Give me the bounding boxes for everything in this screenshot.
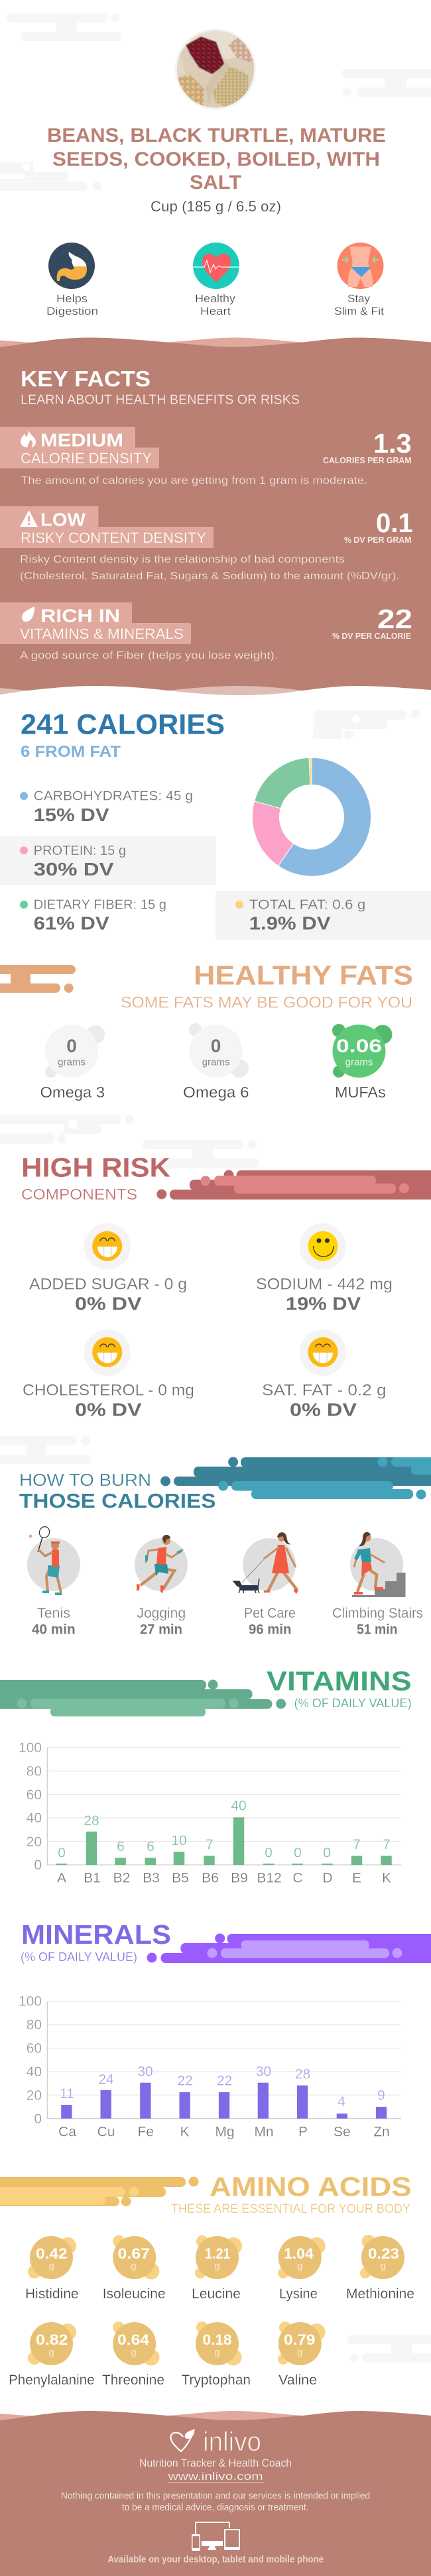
risk item: sodium: [256, 1223, 393, 1314]
macro: protein: 30% DV: [34, 859, 114, 879]
serving size: Cup (185 g / 6.5 oz): [151, 198, 281, 215]
title: SEEDS, COOKED, BOILED, WITH: [52, 148, 380, 170]
macro: dietary fiber: DIETARY FIBER: 15 g: [34, 898, 166, 913]
fat: mufas: 0.06: [336, 1036, 382, 1056]
macro: protein: [0, 836, 216, 885]
fat: omega 3: grams: [58, 1057, 86, 1068]
disclaimer: to be a medical advice, diagnosis or treatment.: [122, 2502, 309, 2513]
fact: low risky content density: [0, 506, 413, 582]
macro: total fat: 1.9% DV: [249, 913, 331, 934]
disclaimer: [61, 2491, 370, 2513]
heading: key facts: LEARN ABOUT HEALTH BENEFITS OR RISKS: [21, 392, 300, 407]
activity: pet care: [233, 1532, 298, 1638]
amino acid: histidine: [25, 2236, 79, 2302]
heading: vitamins: (% OF DAILY VALUE): [294, 1697, 412, 1710]
icon: woman walking dog: [233, 1532, 298, 1594]
heading: healthy fats: SOME FATS MAY BE GOOD FOR YOU: [121, 994, 412, 1012]
fact: medium calorie density: CALORIES PER GRAM: [323, 455, 412, 465]
macro: carbohydrates: CARBOHYDRATES: 45 g: [34, 789, 193, 804]
benefit: stay slim and fit: Stay: [347, 292, 370, 305]
bar chart: vitamins: B12: [257, 1871, 282, 1886]
bar chart: minerals: 11: [60, 2086, 74, 2101]
activity: jogging: [135, 1535, 188, 1638]
amino acid: leucine: [192, 2235, 242, 2302]
amino acid: valine: Valine: [278, 2373, 317, 2388]
amino acid: isoleucine: Isoleucine: [103, 2286, 166, 2302]
amino acid: histidine: 0.42: [36, 2245, 68, 2262]
fact: low risky content density: (Cholesterol, Saturated Fat, Sugars & Sodium) to the amount (%DV/gr).: [20, 571, 399, 582]
bar chart: vitamins: B1: [84, 1871, 101, 1886]
bar chart: vitamins: C: [292, 1871, 303, 1886]
amino acid: threonine: Threonine: [102, 2373, 164, 2388]
bar chart: vitamins: 100: [19, 1740, 42, 1756]
fact: rich in vitamins and minerals: RICH IN: [40, 606, 120, 626]
bar chart: vitamins: 0: [323, 1846, 331, 1861]
risk item: saturated fat: SAT. FAT - 0.2 g: [262, 1382, 386, 1400]
bar chart: minerals: P: [298, 2124, 308, 2139]
title: SALT: [190, 172, 241, 194]
bar chart: minerals: 4: [338, 2094, 345, 2109]
fact: medium calorie density: CALORIE DENSITY: [21, 450, 152, 467]
footer tagline: Nutrition Tracker & Health Coach: [139, 2457, 292, 2469]
heading: calories: [21, 709, 225, 761]
header: food photo: [175, 29, 256, 110]
icon: smiling face: [308, 1231, 338, 1261]
amino acid: tryptophan: [182, 2322, 251, 2388]
amino acid: isoleucine: g: [131, 2261, 137, 2272]
fat: mufas: [332, 1024, 393, 1101]
activity: climbing stairs: Climbing Stairs: [332, 1606, 423, 1621]
icon: grinning face: [92, 1231, 122, 1261]
benefit: stay slim and fit: [334, 243, 384, 317]
amino acid: leucine: Leucine: [192, 2286, 241, 2302]
fat: mufas: grams: [345, 1057, 373, 1068]
heading: how to burn those calories: [19, 1470, 216, 1512]
title: BEANS, BLACK TURTLE, MATURE: [47, 125, 386, 146]
heading: key facts: [21, 366, 300, 407]
risk item: cholesterol: CHOLESTEROL - 0 mg: [23, 1382, 194, 1400]
amino acid: isoleucine: [103, 2235, 166, 2302]
bar chart: vitamins: 10: [171, 1833, 187, 1848]
amino acid: leucine: 1.21: [205, 2245, 230, 2262]
bar chart: vitamins: 20: [27, 1834, 42, 1850]
macro: total fat: TOTAL FAT: 0.6 g: [249, 898, 365, 913]
bar chart: vitamins: 40: [231, 1799, 247, 1814]
activity: climbing stairs: 51 min: [357, 1622, 398, 1638]
fat: omega 6: grams: [202, 1057, 229, 1068]
banner: vitamins graphic: [0, 1679, 286, 1716]
bar chart: vitamins: 60: [27, 1787, 42, 1803]
fat: omega 6: Omega 6: [183, 1084, 249, 1101]
fact: medium calorie density: MEDIUM: [40, 430, 123, 451]
bar chart: vitamins: K: [382, 1871, 391, 1886]
bar chart: vitamins: 0: [34, 1858, 42, 1873]
fact: medium calorie density: [0, 427, 412, 486]
icon: warning triangle: [20, 510, 38, 527]
fact: low risky content density: RISKY CONTENT DENSITY: [21, 530, 206, 546]
amino acid: tryptophan: g: [214, 2347, 220, 2358]
logo: inlivo: inlivo: [203, 2426, 261, 2457]
title: [47, 125, 386, 194]
heading: how to burn those calories: HOW TO BURN: [19, 1470, 151, 1490]
footer link: www.inlivo.com: [167, 2470, 263, 2483]
bar chart: minerals: 0: [34, 2111, 42, 2127]
heading: amino acids: THESE ARE ESSENTIAL FOR YOUR BODY: [171, 2202, 410, 2216]
amino acid: phenylalanine: [9, 2322, 95, 2388]
fat: mufas: MUFAs: [335, 1084, 386, 1101]
fact: low risky content density: Risky Content density is the relationship of bad components: [20, 554, 345, 565]
fat: omega 3: Omega 3: [40, 1084, 105, 1101]
benefit: stay slim and fit: Slim & Fit: [334, 305, 384, 317]
benefit: helps digestion: [46, 243, 98, 317]
bar chart: minerals: Se: [334, 2124, 351, 2139]
availability note: Available on your desktop, tablet and mobile phone: [107, 2555, 324, 2565]
bar chart: vitamins: 28: [84, 1813, 99, 1828]
banner: healthy fats graphic: [0, 965, 76, 993]
heading: healthy fats: HEALTHY FATS: [194, 960, 413, 991]
icon: desktop, tablet and phone: [192, 2522, 240, 2551]
amino acid: threonine: 0.64: [117, 2331, 150, 2348]
heading: vitamins: VITAMINS: [267, 1666, 412, 1697]
bar chart: minerals: K: [180, 2124, 190, 2139]
activity: climbing stairs: [332, 1532, 423, 1638]
macro: protein: PROTEIN: 15 g: [34, 844, 126, 858]
fact: rich in vitamins and minerals: 22: [377, 604, 412, 634]
risk item: cholesterol: [23, 1329, 194, 1420]
banner: high risk graphic: [156, 1170, 431, 1200]
bar chart: minerals: 24: [98, 2072, 114, 2087]
heading: how to burn those calories: THOSE CALORIES: [19, 1489, 216, 1512]
panel: calories: [0, 709, 431, 940]
icon: tennis player: [38, 1525, 62, 1595]
bar chart: vitamins: E: [352, 1871, 361, 1886]
amino acid: methionine: g: [380, 2261, 386, 2272]
fact: low risky content density: % DV PER GRAM: [344, 535, 412, 545]
fat: omega 6: [183, 1023, 249, 1101]
bar chart: vitamins: B9: [231, 1871, 248, 1886]
macro: carbohydrates: [20, 789, 193, 825]
heading: minerals: [21, 1919, 171, 1964]
amino acid: lysine: 1.04: [284, 2245, 314, 2262]
amino acid: threonine: [102, 2322, 164, 2388]
risk item: sodium: 19% DV: [286, 1294, 361, 1314]
bar chart: vitamins: A: [57, 1871, 66, 1886]
bar chart: minerals: Zn: [373, 2124, 390, 2139]
macro: dietary fiber: 61% DV: [34, 913, 109, 934]
fact: rich in vitamins and minerals: % DV PER CALORIE: [332, 631, 411, 641]
banner: amino acids graphic: [0, 2176, 199, 2206]
fat: omega 3: 0: [66, 1036, 77, 1056]
activity: tennis: Tenis: [37, 1606, 70, 1621]
bar chart: vitamins: 7: [206, 1837, 214, 1852]
macro: dietary fiber: [20, 898, 166, 934]
bar chart: minerals: 9: [377, 2088, 385, 2103]
heading: calories: 241 CALORIES: [21, 709, 225, 741]
panel: key facts: [0, 338, 431, 695]
amino acid: leucine: g: [214, 2261, 220, 2272]
risk item: added sugar: ADDED SUGAR - 0 g: [29, 1276, 187, 1294]
fat: omega 3: [40, 1025, 105, 1101]
amino acid: lysine: [278, 2236, 326, 2302]
risk item: sodium: SODIUM - 442 mg: [256, 1276, 393, 1294]
bar chart: minerals: Fe: [137, 2124, 154, 2139]
benefit: healthy heart: [193, 243, 239, 317]
heading: healthy fats: [121, 960, 413, 1012]
bar chart: vitamins: 7: [383, 1837, 391, 1852]
activity: pet care: 96 min: [249, 1622, 292, 1638]
heading: key facts: KEY FACTS: [21, 366, 151, 391]
bar chart: minerals: 22: [177, 2074, 193, 2089]
heading: amino acids: [171, 2171, 412, 2216]
bar chart: vitamins: 0: [265, 1846, 273, 1861]
disclaimer: Nothing contained in this presentation and our services is intended or implied: [61, 2491, 370, 2502]
bar chart: vitamins: 80: [27, 1764, 42, 1779]
activity: pet care: Pet Care: [244, 1606, 296, 1621]
icon: grinning face: [92, 1337, 122, 1367]
bar chart: vitamins: B5: [172, 1871, 189, 1886]
fact: medium calorie density: 1.3: [373, 428, 412, 459]
icon: runner: [137, 1535, 183, 1593]
amino acid: lysine: g: [297, 2261, 302, 2272]
fact: rich in vitamins and minerals: A good source of Fiber (helps you lose weight).: [20, 650, 278, 661]
amino acid: methionine: 0.23: [368, 2245, 399, 2262]
bar chart: vitamins: [19, 1740, 401, 1886]
activity: tennis: [27, 1525, 80, 1638]
activity: jogging: Jogging: [137, 1606, 186, 1621]
bar chart: minerals: [19, 1994, 401, 2139]
heading: high risk components: [21, 1152, 170, 1203]
benefit: healthy heart: Healthy: [195, 292, 236, 305]
icon: leaf: [22, 606, 34, 622]
bar chart: minerals: 22: [217, 2074, 232, 2089]
bar chart: vitamins: B2: [113, 1871, 130, 1886]
fact: rich in vitamins and minerals: [0, 602, 412, 661]
benefit: helps digestion: Helps: [56, 292, 88, 305]
heading: high risk components: COMPONENTS: [21, 1186, 137, 1203]
bar chart: minerals: 28: [295, 2067, 310, 2082]
risk item: cholesterol: 0% DV: [75, 1400, 142, 1420]
benefit: healthy heart: Heart: [200, 305, 231, 317]
macro: carbohydrates: 15% DV: [34, 805, 109, 825]
banner: minerals graphic: [147, 1934, 431, 1963]
amino acid: methionine: Methionine: [346, 2286, 414, 2302]
fact: medium calorie density: The amount of calories you are getting from 1 gram is moderate.: [21, 475, 367, 486]
heading: vitamins: [267, 1666, 412, 1710]
risk item: saturated fat: [262, 1329, 386, 1420]
heading: high risk components: HIGH RISK: [21, 1152, 170, 1183]
bar chart: minerals: Ca: [58, 2124, 76, 2139]
bar chart: vitamins: 7: [353, 1837, 361, 1852]
amino acid: valine: 0.79: [284, 2331, 316, 2348]
heading: minerals: MINERALS: [21, 1919, 171, 1950]
bar chart: minerals: 100: [19, 1994, 42, 2009]
risk item: added sugar: 0% DV: [75, 1294, 142, 1314]
amino acid: methionine: [346, 2235, 414, 2302]
bar chart: vitamins: B3: [143, 1871, 160, 1886]
amino acid: valine: [278, 2322, 326, 2388]
heading: calories: 6 FROM FAT: [21, 743, 121, 761]
bar chart: vitamins: 40: [27, 1811, 42, 1826]
amino acid: phenylalanine: g: [48, 2347, 54, 2358]
bar chart: minerals: Mn: [254, 2124, 274, 2139]
benefit: helps digestion: Digestion: [46, 305, 98, 317]
amino acid: tryptophan: Tryptophan: [182, 2373, 251, 2388]
activity: jogging: 27 min: [140, 1622, 182, 1638]
bar chart: minerals: Cu: [97, 2124, 115, 2139]
bar chart: vitamins: D: [322, 1871, 333, 1886]
bar chart: minerals: Mg: [215, 2124, 235, 2139]
bar chart: minerals: 30: [137, 2064, 153, 2080]
amino acid: phenylalanine: Phenylalanine: [9, 2373, 95, 2388]
amino acid: valine: g: [297, 2347, 302, 2358]
bar chart: minerals: 30: [256, 2064, 271, 2080]
bar chart: vitamins: 0: [294, 1846, 302, 1861]
bar chart: vitamins: 6: [117, 1839, 125, 1854]
risk item: added sugar: [29, 1223, 187, 1314]
bar chart: minerals: 80: [27, 2017, 42, 2033]
bar chart: vitamins: B6: [202, 1871, 219, 1886]
amino acid: tryptophan: 0.18: [203, 2331, 232, 2348]
icon: flame: [21, 430, 36, 447]
risk item: saturated fat: 0% DV: [290, 1400, 357, 1420]
heading: minerals: (% OF DAILY VALUE): [21, 1950, 137, 1964]
logo: inlivo: [170, 2426, 261, 2457]
amino acid: histidine: g: [48, 2261, 54, 2272]
fact: low risky content density: LOW: [40, 510, 86, 530]
macro: total fat: [216, 891, 431, 940]
amino acid: phenylalanine: 0.82: [36, 2331, 68, 2348]
fact: low risky content density: 0.1: [376, 508, 413, 538]
bar chart: vitamins: 6: [147, 1839, 154, 1854]
activity: tennis: 40 min: [32, 1622, 76, 1638]
heading: amino acids: AMINO ACIDS: [210, 2171, 412, 2202]
banner: burn calories graphic: [160, 1457, 431, 1499]
donut chart: calorie sources: [252, 757, 371, 876]
fact: rich in vitamins and minerals: VITAMINS & MINERALS: [20, 626, 184, 642]
amino acid: isoleucine: 0.67: [118, 2245, 150, 2262]
amino acid: histidine: Histidine: [25, 2286, 79, 2302]
amino acid: threonine: g: [131, 2347, 137, 2358]
panel: footer: [0, 2411, 431, 2576]
bar chart: minerals: 20: [27, 2088, 42, 2103]
fat: omega 6: 0: [211, 1036, 221, 1056]
bar chart: minerals: 60: [27, 2041, 42, 2056]
bar chart: vitamins: 0: [58, 1846, 66, 1861]
amino acid: lysine: Lysine: [279, 2286, 318, 2302]
bar chart: minerals: 40: [27, 2064, 42, 2080]
icon: grinning face: [308, 1337, 338, 1367]
icon: woman climbing stairs: [352, 1532, 406, 1597]
